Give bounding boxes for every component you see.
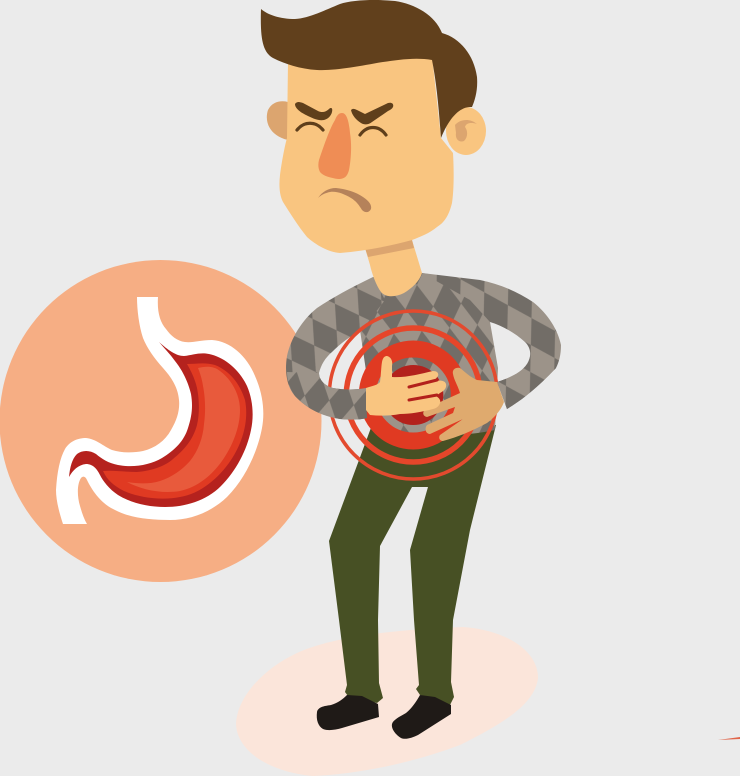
left eyebrow (295, 102, 332, 120)
right-side hand (423, 368, 504, 441)
icon: stomach (56, 297, 263, 524)
mouth (318, 188, 371, 212)
left shoe (317, 695, 379, 730)
right shoe (392, 695, 451, 739)
stomach dark red wall (69, 342, 253, 507)
sweater torso (360, 273, 498, 436)
stomach white outline (56, 297, 263, 524)
stomach mid red layer (103, 363, 246, 499)
trousers (329, 425, 496, 705)
finger gaps (409, 380, 437, 400)
inner thick ring (367, 349, 459, 441)
shoes (317, 695, 451, 739)
sweater left arm (286, 277, 385, 420)
right eyebrow (351, 103, 393, 124)
head (261, 0, 486, 253)
peach circle behind stomach (0, 260, 322, 582)
left closed eye (297, 123, 323, 130)
second ring (346, 328, 480, 462)
floor shadow ellipse (236, 627, 538, 776)
neck (365, 240, 422, 296)
face (279, 56, 454, 253)
right closed eye (360, 128, 386, 135)
hair (261, 0, 477, 138)
stomach light red inner (127, 367, 240, 492)
nose (318, 113, 351, 179)
inner ear (455, 120, 477, 142)
pain rings (329, 311, 497, 479)
left ear (267, 101, 288, 140)
left forearm sleeve (287, 372, 367, 420)
outer ring (329, 311, 497, 479)
right forearm sleeve (497, 364, 556, 409)
left-side hand (366, 356, 446, 416)
sweater right arm (422, 273, 561, 409)
small red mark at bottom right (718, 737, 740, 740)
neck shadow (365, 240, 414, 257)
red core (383, 365, 443, 425)
right ear (446, 107, 486, 155)
